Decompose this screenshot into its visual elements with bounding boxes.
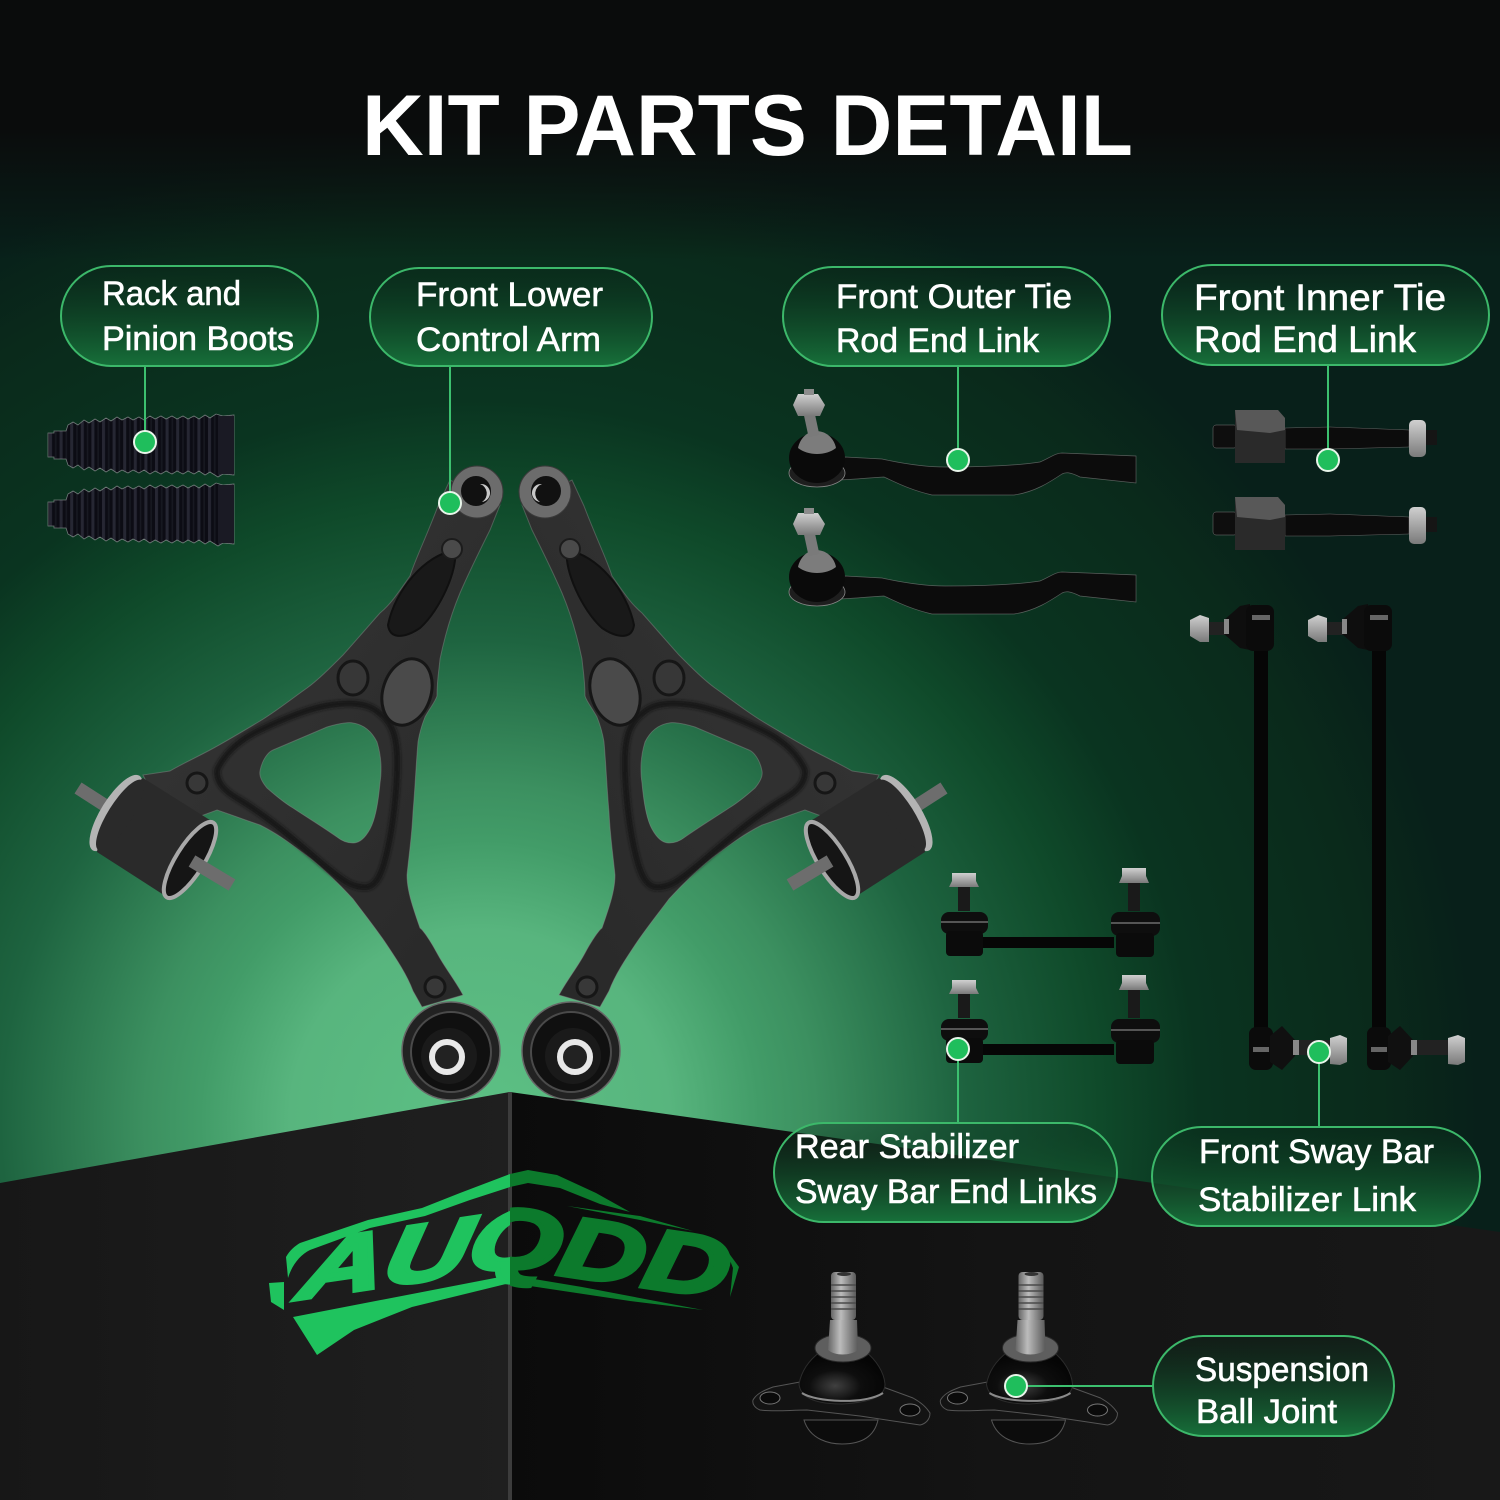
outer tie rod end (upper) [789, 389, 1136, 495]
callout: Front Inner Tie Rod End Link [1162, 265, 1489, 471]
callout: Front Outer Tie Rod End Link: Rod End Link [836, 322, 1040, 360]
callout: Rear Stabilizer Sway Bar End Links: Rear Stabilizer [795, 1128, 1019, 1166]
inner tie rod (upper) [1213, 410, 1437, 463]
ball joint (left) [753, 1272, 930, 1444]
callout: Front Outer Tie Rod End Link: Front Outer Tie [836, 278, 1072, 316]
callout: Front Inner Tie Rod End Link: Front Inner Tie [1194, 277, 1446, 318]
callout: Suspension Ball Joint: Ball Joint [1196, 1393, 1338, 1431]
callout: Rear Stabilizer Sway Bar End Links: Sway Bar End Links [795, 1173, 1097, 1211]
rear stabilizer link (lower) [941, 975, 1160, 1064]
callout: Suspension Ball Joint [1005, 1336, 1394, 1436]
callout: Rear Stabilizer Sway Bar End Links [774, 1038, 1117, 1222]
callout: Front Lower Control Arm [370, 268, 652, 514]
dark box corner [0, 1092, 1500, 1500]
callout: Rack and Pinion Boots: Rack and [102, 275, 241, 313]
title: KIT PARTS DETAIL [362, 78, 1133, 174]
callout: Front Sway Bar Stabilizer Link: Front Sway Bar [1199, 1133, 1434, 1171]
callout: Front Inner Tie Rod End Link: Rod End Link [1194, 319, 1416, 360]
logo: AUQDD: AUQDD [290, 1161, 739, 1317]
callout: Front Outer Tie Rod End Link [783, 267, 1110, 471]
front sway bar link (right) [1308, 604, 1465, 1070]
inner tie rod (lower) [1213, 497, 1437, 550]
ball joint (right) [940, 1272, 1118, 1444]
rack and pinion boots (upper) [48, 414, 234, 477]
callout: Front Lower Control Arm: Control Arm [416, 321, 601, 359]
outer tie rod end (lower) [789, 508, 1136, 614]
callout: Front Lower Control Arm: Front Lower [416, 276, 603, 314]
logo: AUQDD [269, 1161, 739, 1355]
callout: Front Sway Bar Stabilizer Link: Stabilizer Link [1198, 1181, 1417, 1219]
right front lower control arm [519, 466, 944, 1100]
front sway bar link (left) [1190, 604, 1347, 1070]
callout: Rack and Pinion Boots [61, 266, 318, 453]
callout: Front Sway Bar Stabilizer Link [1152, 1041, 1480, 1226]
rack and pinion boots (lower) [48, 483, 234, 546]
logo: AUQDD: AUQDD [290, 1161, 739, 1319]
callout: Rack and Pinion Boots: Pinion Boots [102, 320, 294, 358]
callout: Suspension Ball Joint: Suspension [1195, 1351, 1369, 1389]
left front lower control arm [78, 466, 503, 1100]
rear stabilizer link (upper) [941, 868, 1160, 957]
